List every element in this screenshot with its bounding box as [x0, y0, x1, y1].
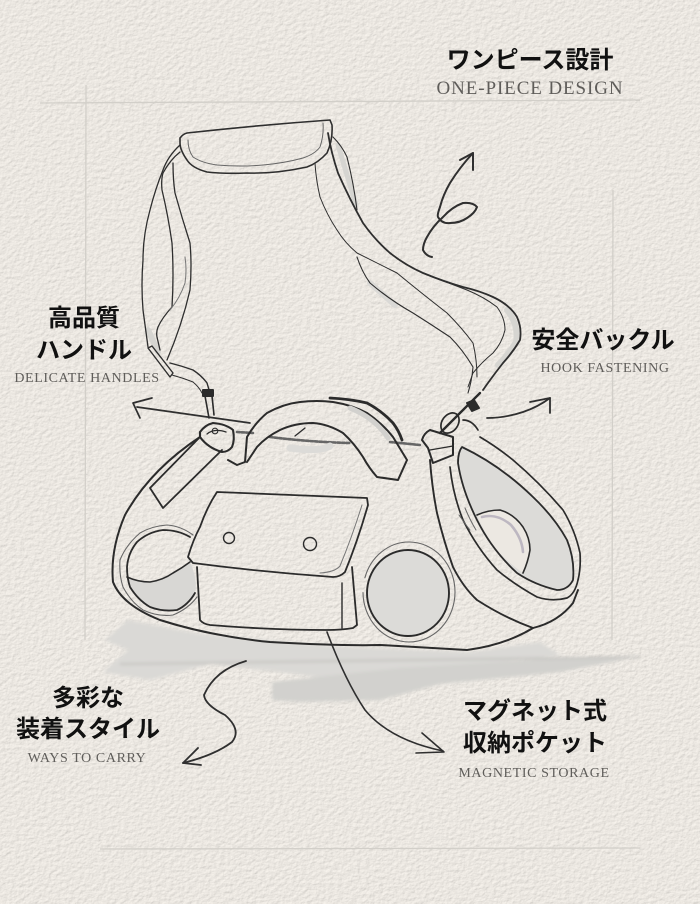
outer ring — [450, 437, 580, 600]
left circular window — [120, 525, 197, 615]
top zip — [237, 432, 420, 445]
inside fill: right opening — [458, 447, 573, 590]
center round window — [363, 542, 455, 642]
label: hook fastening: 安全バックル — [531, 327, 675, 354]
label: ways to carry: 多彩な — [52, 685, 124, 712]
label: delicate handles: 高品質 — [48, 305, 120, 332]
right large opening — [430, 437, 580, 628]
strap pad — [180, 120, 332, 173]
right hook — [437, 393, 480, 437]
left hook — [203, 390, 214, 418]
shoulder strap — [142, 120, 521, 393]
arrow: delicate handles — [133, 398, 250, 423]
left strap section — [142, 145, 210, 393]
label: ways to carry — [16, 685, 160, 766]
label: magnetic storage — [458, 697, 610, 781]
right strap tab — [422, 430, 453, 463]
arrow: magnetic storage — [327, 632, 444, 753]
pocket flap — [188, 492, 368, 577]
arrow: one-piece swirl — [423, 153, 477, 257]
handle — [228, 398, 407, 480]
right strap section — [315, 133, 521, 393]
label: delicate handles — [14, 305, 160, 386]
label: one-piece design: ONE-PIECE DESIGN — [437, 78, 623, 99]
label: ways to carry: 装着スタイル — [16, 716, 160, 743]
label: magnetic storage: 収納ポケット — [463, 730, 607, 757]
label: ways to carry: WAYS TO CARRY — [28, 751, 146, 766]
label: delicate handles: DELICATE HANDLES — [14, 371, 160, 386]
front pocket — [188, 492, 368, 630]
arrow: hook fastening — [487, 398, 550, 418]
label: hook fastening: HOOK FASTENING — [540, 361, 670, 376]
left tab — [150, 423, 234, 508]
arrows — [133, 153, 550, 765]
ground shadow — [103, 620, 640, 702]
label: one-piece design — [437, 47, 623, 99]
bag — [112, 390, 580, 650]
label: magnetic storage: MAGNETIC STORAGE — [458, 766, 610, 781]
label: delicate handles: ハンドル — [36, 337, 132, 364]
label: hook fastening — [531, 327, 675, 376]
label: magnetic storage: マグネット式 — [463, 697, 607, 725]
arrow: ways to carry — [183, 661, 246, 765]
label: one-piece design: ワンピース設計 — [447, 47, 613, 74]
body outline — [112, 437, 533, 650]
